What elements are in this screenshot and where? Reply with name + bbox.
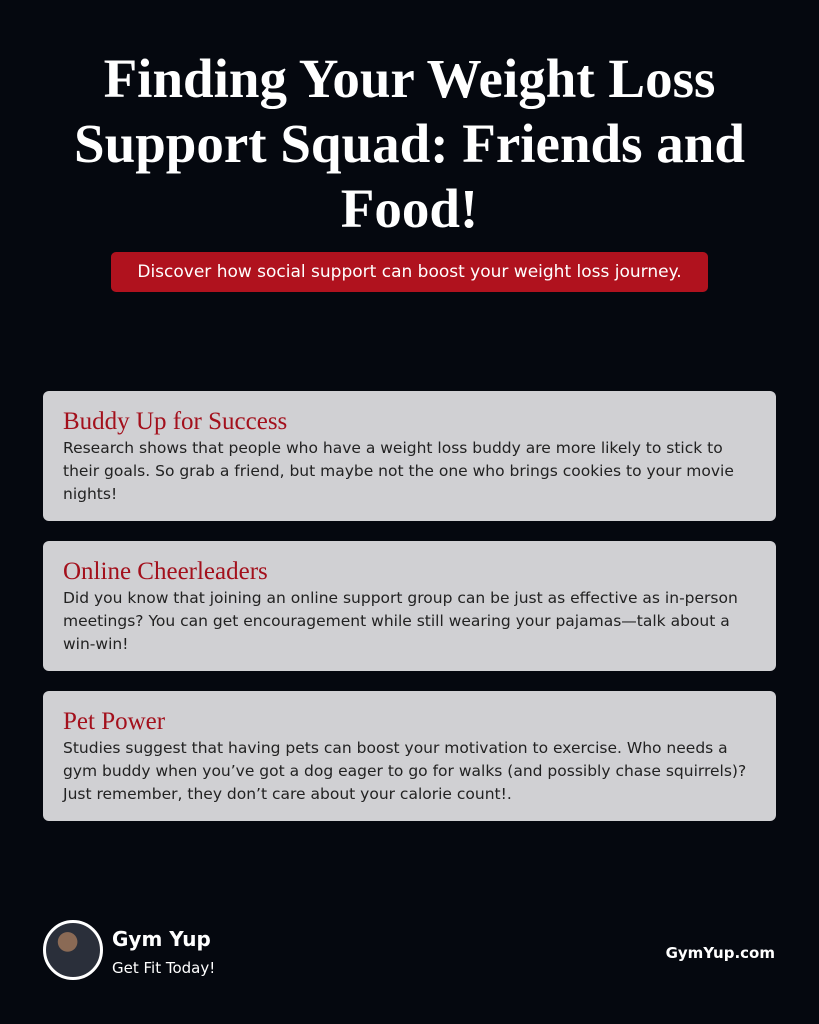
panel: online cheerleaders: Online Cheerleaders: [63, 558, 268, 585]
panel: buddy up: Buddy Up for Success: [63, 408, 287, 435]
subtitle pill: [111, 252, 708, 292]
title: [74, 48, 745, 239]
panel: online cheerleaders: Did you know that joining an online support group can be just as effective as in-person meetings? You can get encouragement while still wearing your pajamas—talk about a win-win!: [63, 589, 738, 653]
tagline: Get Fit Today!: [112, 959, 215, 977]
title: Food!: [341, 178, 478, 239]
panel: pet power: Studies suggest that having pets can boost your motivation to exercise. Who needs a gym buddy when you’ve got a dog eager to go for walks (and possibly chase squirrels)? Just remember, they don’t care about your calorie count!.: [63, 739, 746, 803]
panel: pet power: Pet Power: [63, 708, 165, 735]
subtitle pill: Discover how social support can boost your weight loss journey.: [137, 262, 682, 282]
icon: avatar: [43, 920, 103, 980]
panel: buddy up: [43, 391, 776, 521]
brand name: Gym Yup: [112, 927, 211, 951]
panel: pet power: [43, 691, 776, 821]
panel: online cheerleaders: [43, 541, 776, 671]
panel: buddy up: Research shows that people who have a weight loss buddy are more likely to stick to their goals. So grab a friend, but maybe not the one who brings cookies to your movie nights!: [63, 439, 734, 503]
website: GymYup.com: [666, 944, 775, 962]
title: Finding Your Weight Loss: [104, 48, 715, 109]
title: Support Squad: Friends and: [74, 113, 745, 174]
